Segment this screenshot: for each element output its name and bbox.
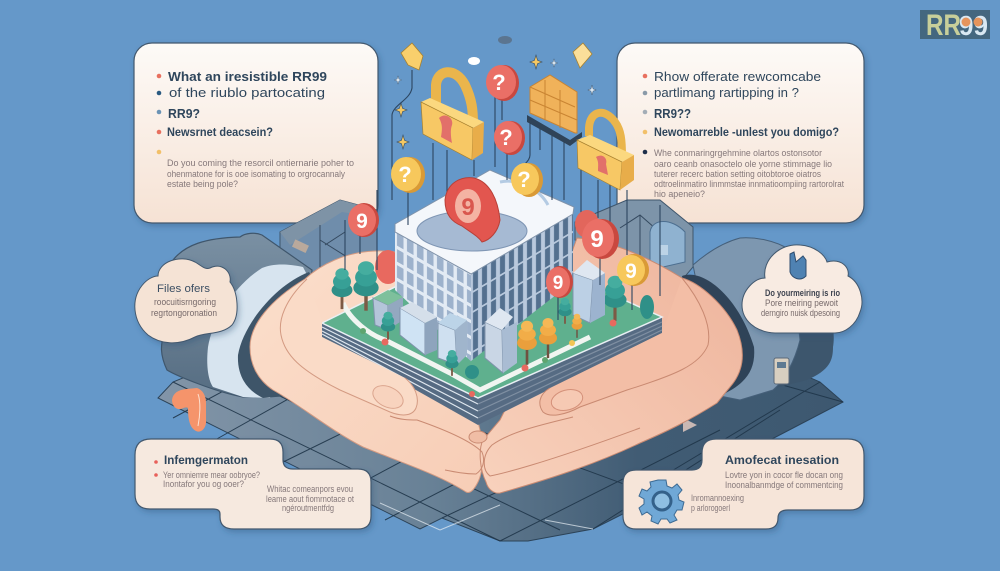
sleeve body — [161, 233, 312, 397]
right hand — [480, 238, 742, 493]
cloud left: roocuitisrngoring — [154, 297, 216, 307]
heading: partlimang rartipping in ? — [654, 85, 799, 100]
panel: bottom left: Yer omniemre mear oobryoe? — [163, 470, 260, 480]
pin yellow 2: ? — [517, 167, 531, 192]
tower front — [485, 308, 517, 373]
walkway — [343, 303, 590, 390]
cloud left — [135, 259, 237, 343]
heading — [654, 69, 839, 139]
floor grid — [158, 330, 843, 541]
panel: top right — [617, 43, 864, 223]
heading: Rhow offerate rewcomcabe — [654, 69, 821, 84]
panel: bottom right: Amofecat inesation — [725, 453, 839, 467]
cloud right: Pore rneiring pewoit — [765, 298, 838, 308]
logo: 99 — [959, 10, 988, 41]
right nail — [549, 386, 585, 414]
panel: bottom right: p arlorogoerl — [691, 503, 730, 513]
body text: odtroelinmatiro linmmstae innmatioompiing rartorolrat — [654, 179, 844, 189]
left thumb — [280, 279, 418, 415]
body text: estate being pole? — [167, 179, 238, 189]
heading: RR9? — [168, 106, 200, 121]
platform — [322, 240, 662, 425]
cloud right — [742, 245, 862, 333]
left sleeve — [161, 200, 377, 398]
panel: bottom right: Inromannoexing — [691, 493, 744, 503]
red roof icon: 9 — [461, 194, 475, 221]
body text: Whe conmaringrgehmine olartos ostonsotor — [654, 148, 822, 158]
strings — [345, 70, 660, 320]
cuff ring — [238, 272, 325, 398]
heading: Newsrnet deacsein? — [167, 125, 273, 139]
cloud left: Files ofers — [157, 283, 211, 295]
right facade — [471, 212, 573, 361]
panel: bottom right: Lovtre yon in cocor fle docan ong — [725, 470, 843, 480]
pin yellow 1: ? — [398, 162, 412, 187]
logo: RR — [926, 9, 961, 42]
device right — [575, 200, 693, 280]
panel: bottom right — [623, 439, 864, 529]
cuff band — [207, 264, 320, 398]
heading: of the riublo partocating — [169, 85, 325, 100]
fingers — [390, 416, 640, 476]
tower right — [573, 260, 605, 323]
body text: Do you coming the resorcil ontiernarie poher to — [167, 158, 354, 168]
low building — [373, 290, 403, 330]
panel: bottom right: Inoonalbanmdge of commentcing — [725, 480, 843, 490]
stars — [394, 36, 596, 149]
pin red 3 — [348, 203, 379, 237]
cloud right: derngiro nuisk dpesoing — [761, 308, 840, 318]
entrance — [400, 302, 437, 355]
padlock right — [577, 113, 634, 190]
body text — [654, 148, 844, 199]
pin red 4 — [575, 210, 619, 259]
panel: bottom left: Inontafor you og ooer? — [163, 479, 244, 489]
pin yellow 1 — [391, 157, 425, 193]
partly hidden red pin — [375, 250, 401, 284]
pin red 4: 9 — [590, 226, 604, 253]
heading: RR9?? — [654, 106, 691, 121]
pin red 2 — [494, 121, 525, 155]
heading — [167, 69, 327, 139]
pin red 2: ? — [499, 125, 513, 150]
panel: bottom left — [135, 439, 371, 529]
body text: oaro ceanb onasoctelo ole yorne stimmage lio — [654, 159, 832, 169]
bullets — [643, 74, 647, 154]
red roof icon — [445, 178, 500, 242]
padlock left — [421, 72, 484, 160]
right thumb — [540, 278, 709, 415]
small buildings — [373, 260, 605, 373]
icon: gear — [639, 480, 684, 524]
roof well — [417, 211, 527, 251]
main building — [395, 170, 574, 361]
body text: tuterer recerc bation setting oitobtoroe oiatros — [654, 169, 821, 179]
pin red 5: 9 — [553, 273, 563, 294]
pin red 1: ? — [492, 70, 506, 95]
panel: bottom left: Whitac comeanpors evou — [267, 484, 353, 494]
pin red 3: 9 — [356, 210, 368, 233]
right sleeve — [575, 200, 834, 400]
panel: bottom left: Infemgermaton — [164, 453, 248, 467]
heading: What an iresistible RR99 — [168, 69, 327, 84]
front trees — [381, 312, 582, 379]
trees behind — [332, 261, 654, 324]
green lawn — [322, 240, 662, 398]
roof — [395, 170, 574, 274]
left nail — [369, 381, 407, 413]
block — [438, 313, 467, 365]
logo — [920, 9, 990, 42]
heading: Newomarreble -unlest you domigo? — [654, 125, 839, 139]
question pins — [348, 65, 649, 298]
plug — [774, 358, 789, 384]
gold stack — [527, 75, 582, 146]
panel: bottom left: ngéroutmentfdg — [282, 503, 334, 513]
pin red 5 — [546, 266, 573, 298]
pin red 1 — [486, 65, 519, 101]
cuff ring right — [682, 275, 754, 397]
pin yellow 2 — [511, 163, 543, 197]
triangle marker — [683, 418, 697, 432]
left hand — [250, 251, 483, 493]
pin yellow 3 — [617, 254, 649, 286]
pin yellow 3: 9 — [625, 260, 637, 283]
icon: hand — [790, 252, 806, 279]
body text: ohenmatone for is ooe isomating to orgrocannaly — [167, 169, 345, 179]
cloud left: regrtongoronation — [151, 308, 217, 318]
panel: bottom left: leame aout fiomrnotace ot — [266, 494, 354, 504]
bullets — [157, 74, 161, 154]
orange hook — [172, 388, 206, 432]
left facade — [395, 230, 471, 361]
cloud right: Do yourmeiring is rio — [765, 288, 840, 299]
body text: hio apeneio? — [654, 189, 705, 199]
machine box left — [280, 200, 377, 280]
body text — [167, 158, 354, 189]
flowers — [360, 320, 616, 397]
panel: top left — [134, 43, 378, 223]
